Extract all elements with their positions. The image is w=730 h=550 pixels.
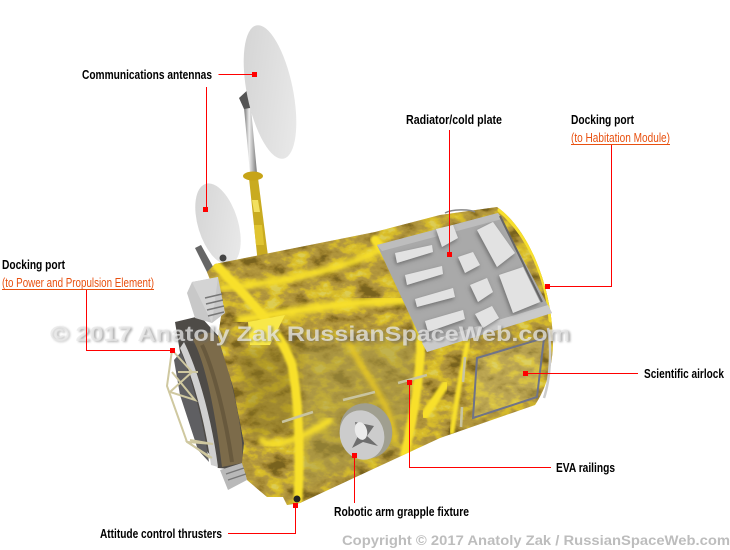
label: communications antennas: Communications antennas (82, 68, 212, 82)
label: radiator/cold plate: Radiator/cold plate (406, 113, 502, 127)
copyright line: Copyright © 2017 Anatoly Zak / RussianSpaceWeb.com (342, 533, 730, 548)
marker squares (170, 72, 550, 508)
icon: EVA railings (282, 357, 465, 427)
label: EVA railings: EVA railings (556, 461, 615, 475)
watermark: © 2017 Anatoly Zak RussianSpaceWeb.com (50, 323, 570, 346)
icon: small communications antenna dish (187, 178, 249, 276)
label: docking port to habitation module: (to Habitation Module) (571, 131, 670, 145)
icon: lower thruster box (220, 463, 247, 490)
panel: docking truss and ring assembly (167, 316, 248, 470)
icon: attitude thruster nozzle (294, 496, 300, 502)
icon: large antenna dish on mast (234, 21, 306, 264)
leader lines (86, 74, 638, 534)
label: attitude control thrusters: Attitude control thrusters (100, 527, 222, 541)
label: docking port to habitation module (571, 113, 670, 145)
panel: gold foil module body (200, 200, 560, 510)
panel: scientific airlock hatch (470, 328, 550, 420)
panel: radiator cold plate (377, 210, 552, 352)
label: robotic arm grapple fixture: Robotic arm grapple fixture (334, 505, 469, 519)
icon: grapple fixture (332, 396, 400, 466)
label: docking port to power and propulsion element: Docking port (2, 258, 66, 272)
label: docking port to power and propulsion element: (to Power and Propulsion Element) (2, 276, 154, 290)
watermark: © 2017 Anatoly Zak RussianSpaceWeb.com (52, 324, 572, 347)
icon: upper thruster box (187, 277, 225, 323)
label: docking port to power and propulsion element (2, 258, 154, 290)
label: docking port to habitation module: Docking port (571, 113, 635, 127)
radiator boxes (395, 222, 540, 332)
